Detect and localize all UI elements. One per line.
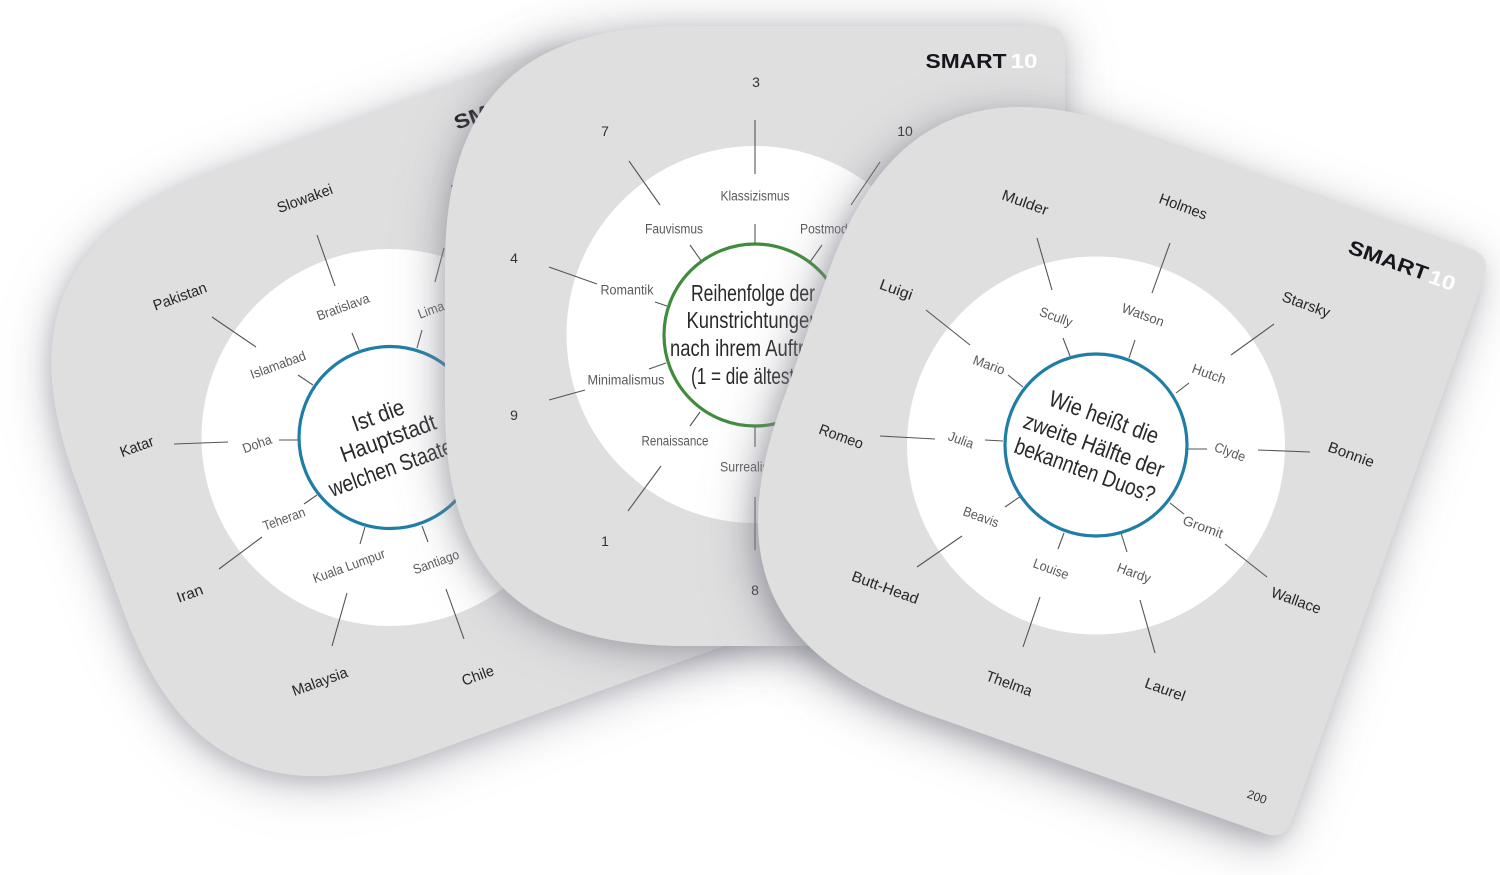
logo (1345, 237, 1458, 296)
duo labels outer: Mulder (1000, 187, 1050, 219)
logo: SMART (1345, 237, 1431, 285)
country labels: Chile (460, 662, 496, 690)
movement labels: Klassizismus (720, 188, 790, 204)
duo labels inner: Mario (971, 352, 1007, 378)
logo: SMART (451, 85, 537, 135)
card shadow (0, 46, 787, 842)
movement labels (588, 188, 872, 474)
question (1011, 385, 1168, 508)
logo: SMART (926, 51, 1006, 73)
question: Ist die (348, 394, 408, 436)
spokes (549, 120, 880, 550)
duo labels inner: Scully (1037, 304, 1075, 330)
ring (664, 244, 846, 426)
number labels: 8 (751, 582, 759, 598)
capital labels (240, 290, 461, 586)
duo labels outer: Laurel (1142, 675, 1188, 705)
duo labels outer: Holmes (1157, 190, 1209, 224)
duo labels inner: Gromit (1181, 513, 1226, 541)
duo labels outer: Butt-Head (849, 568, 921, 608)
question (324, 394, 475, 502)
capital labels: Teheran (261, 504, 307, 534)
panel: right card, duos (692, 49, 1492, 850)
duo labels outer: Wallace (1269, 584, 1323, 618)
country labels: Katar (118, 433, 156, 461)
white disc (907, 256, 1285, 634)
number labels: 3 (752, 74, 760, 90)
duo labels inner: Clyde (1212, 439, 1248, 465)
duo labels outer: Luigi (877, 276, 915, 304)
duo labels inner: Louise (1031, 556, 1071, 582)
question: Hauptstadt (337, 408, 440, 467)
ring (299, 346, 481, 528)
duo labels inner: Beavis (961, 504, 1001, 530)
movement labels: Renaissance (642, 434, 708, 448)
movement labels: Fauvismus (645, 222, 703, 236)
number labels: 9 (510, 407, 518, 423)
duo labels inner: Watson (1120, 300, 1166, 330)
card body (700, 49, 1492, 841)
white disc (202, 249, 578, 626)
duo labels inner: Hardy (1115, 560, 1153, 586)
number labels (510, 74, 913, 598)
duo labels inner (946, 300, 1248, 586)
ring (1005, 354, 1187, 536)
logo (926, 51, 1038, 73)
duo labels inner: Julia (946, 429, 976, 452)
movement labels: Minimalismus (588, 372, 665, 388)
duo labels inner: Hutch (1190, 361, 1228, 387)
panel: middle card, art movements (442, 26, 1065, 652)
country labels: Peru (449, 173, 483, 199)
card number: 200 (1245, 787, 1269, 807)
card shadow (692, 56, 1486, 850)
country labels: Slowakei (275, 181, 335, 217)
logo: 10 (1010, 51, 1038, 73)
capital labels: Lima (416, 298, 447, 322)
duo labels outer: Starsky (1280, 288, 1333, 322)
number labels: 4 (510, 250, 518, 266)
white disc (566, 146, 944, 523)
movement labels: Surrealismus (720, 460, 792, 474)
question: Reihenfolge der (691, 280, 815, 306)
duo labels outer (816, 187, 1376, 705)
country labels: Iran (174, 581, 206, 607)
card shadow (442, 30, 1062, 652)
question: Wie heißt die (1046, 385, 1162, 449)
card body (445, 26, 1065, 646)
movement labels: Postmoderne (800, 222, 872, 236)
capital labels: Doha (240, 432, 274, 456)
duo labels outer: Bonnie (1326, 439, 1376, 471)
question: welchen Staates? (324, 426, 475, 502)
movement labels: Romantik (600, 282, 654, 298)
number labels: 10 (897, 123, 913, 139)
question: zweite Hälfte der (1020, 407, 1168, 483)
question: (1 = die ältesten) (691, 363, 819, 389)
capital labels: Islamabad (248, 348, 308, 382)
spokes (880, 238, 1310, 653)
capital labels: Kuala Lumpur (311, 546, 388, 586)
country labels: Malaysia (290, 664, 351, 700)
number labels: 7 (601, 123, 609, 139)
duo labels outer: Thelma (984, 668, 1035, 700)
spokes (174, 235, 464, 646)
country labels: Pakistan (151, 279, 209, 315)
question: Kunstrichtungen (686, 307, 820, 333)
capital labels: Bratislava (315, 290, 372, 323)
question: bekannten Duos? (1011, 432, 1159, 508)
question: nach ihrem Auftreten (670, 335, 840, 361)
panel: left card, capitals (0, 40, 787, 842)
country labels (118, 173, 496, 700)
card body (0, 40, 787, 835)
question (670, 280, 840, 389)
capital labels: Santiago (411, 547, 461, 577)
number labels: 1 (601, 533, 609, 549)
duo labels outer: Romeo (816, 421, 866, 453)
logo: 10 (1426, 266, 1458, 296)
